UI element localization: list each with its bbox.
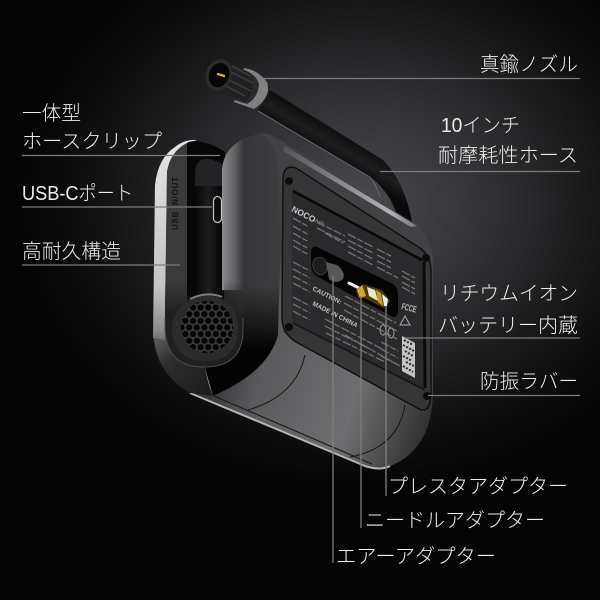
inner label panel: [292, 192, 425, 389]
hose and brass nozzle: [201, 56, 412, 222]
certification marks: FCCE: [401, 301, 417, 315]
hose elbow: [195, 159, 224, 186]
label: brass nozzle: 真鍮ノズル: [480, 53, 578, 76]
bevel highlight: [283, 146, 417, 227]
label: lithium ion: リチウムイオン: [440, 283, 578, 305]
nozzle opening: [201, 56, 237, 94]
middle lobe: [205, 133, 283, 396]
left face: [165, 143, 190, 310]
label: 10 inch hose: 10インチ: [441, 115, 520, 137]
label: built-in battery: バッテリー内蔵: [438, 314, 578, 337]
hose clip: [187, 186, 224, 300]
needle adapter: [349, 283, 361, 289]
label: integrated: 一体型: [22, 102, 81, 125]
device body: [153, 133, 433, 468]
clip recess: [187, 141, 225, 300]
label: presta adapter: プレスタアダプター: [388, 475, 568, 498]
device body: AIR: [313, 218, 325, 229]
lobe shadow crescent: [205, 285, 279, 396]
label: anti-vibration rubber: 防振ラバー: [480, 370, 578, 393]
back panel: [282, 167, 431, 410]
panel bevel: [262, 133, 433, 412]
label: needle adapter: ニードルアダプター: [365, 509, 545, 532]
light bottom edge: [190, 393, 390, 468]
caution print: CAUTION:: [311, 286, 343, 306]
brand print: NOCO: [290, 204, 318, 225]
label: durable structure: 高耐久構造: [22, 240, 121, 263]
label: hose clip: ホースクリップ: [22, 131, 162, 153]
air adapter: [311, 255, 344, 282]
printed small text rows: [293, 218, 415, 366]
usb-c port: [214, 196, 222, 222]
label: durable hose: 耐摩耗性ホース: [438, 144, 578, 167]
qr code: [402, 336, 415, 378]
nozzle collar: [234, 68, 268, 109]
nozzle grip: [210, 60, 253, 102]
adapter slot: [311, 247, 398, 317]
label: usb-c port: USB-Cポート: [22, 182, 133, 205]
speaker grille: [181, 301, 233, 353]
certification marks: [380, 301, 417, 338]
caution print: MADE IN CHINA: [311, 301, 359, 330]
panel screws: [285, 177, 431, 400]
side print: USB IN/OUT: [171, 177, 180, 230]
presta adapter: [356, 284, 390, 308]
leader lines: [22, 78, 580, 563]
light side strip: [153, 140, 197, 340]
lower left shell: [153, 330, 214, 396]
label: air adapter: エアーアダプター: [336, 545, 496, 568]
body silhouette and underside: [153, 133, 433, 468]
caution print: [311, 286, 359, 330]
underside seam lines: [214, 355, 405, 464]
speaker housing: [165, 280, 243, 367]
